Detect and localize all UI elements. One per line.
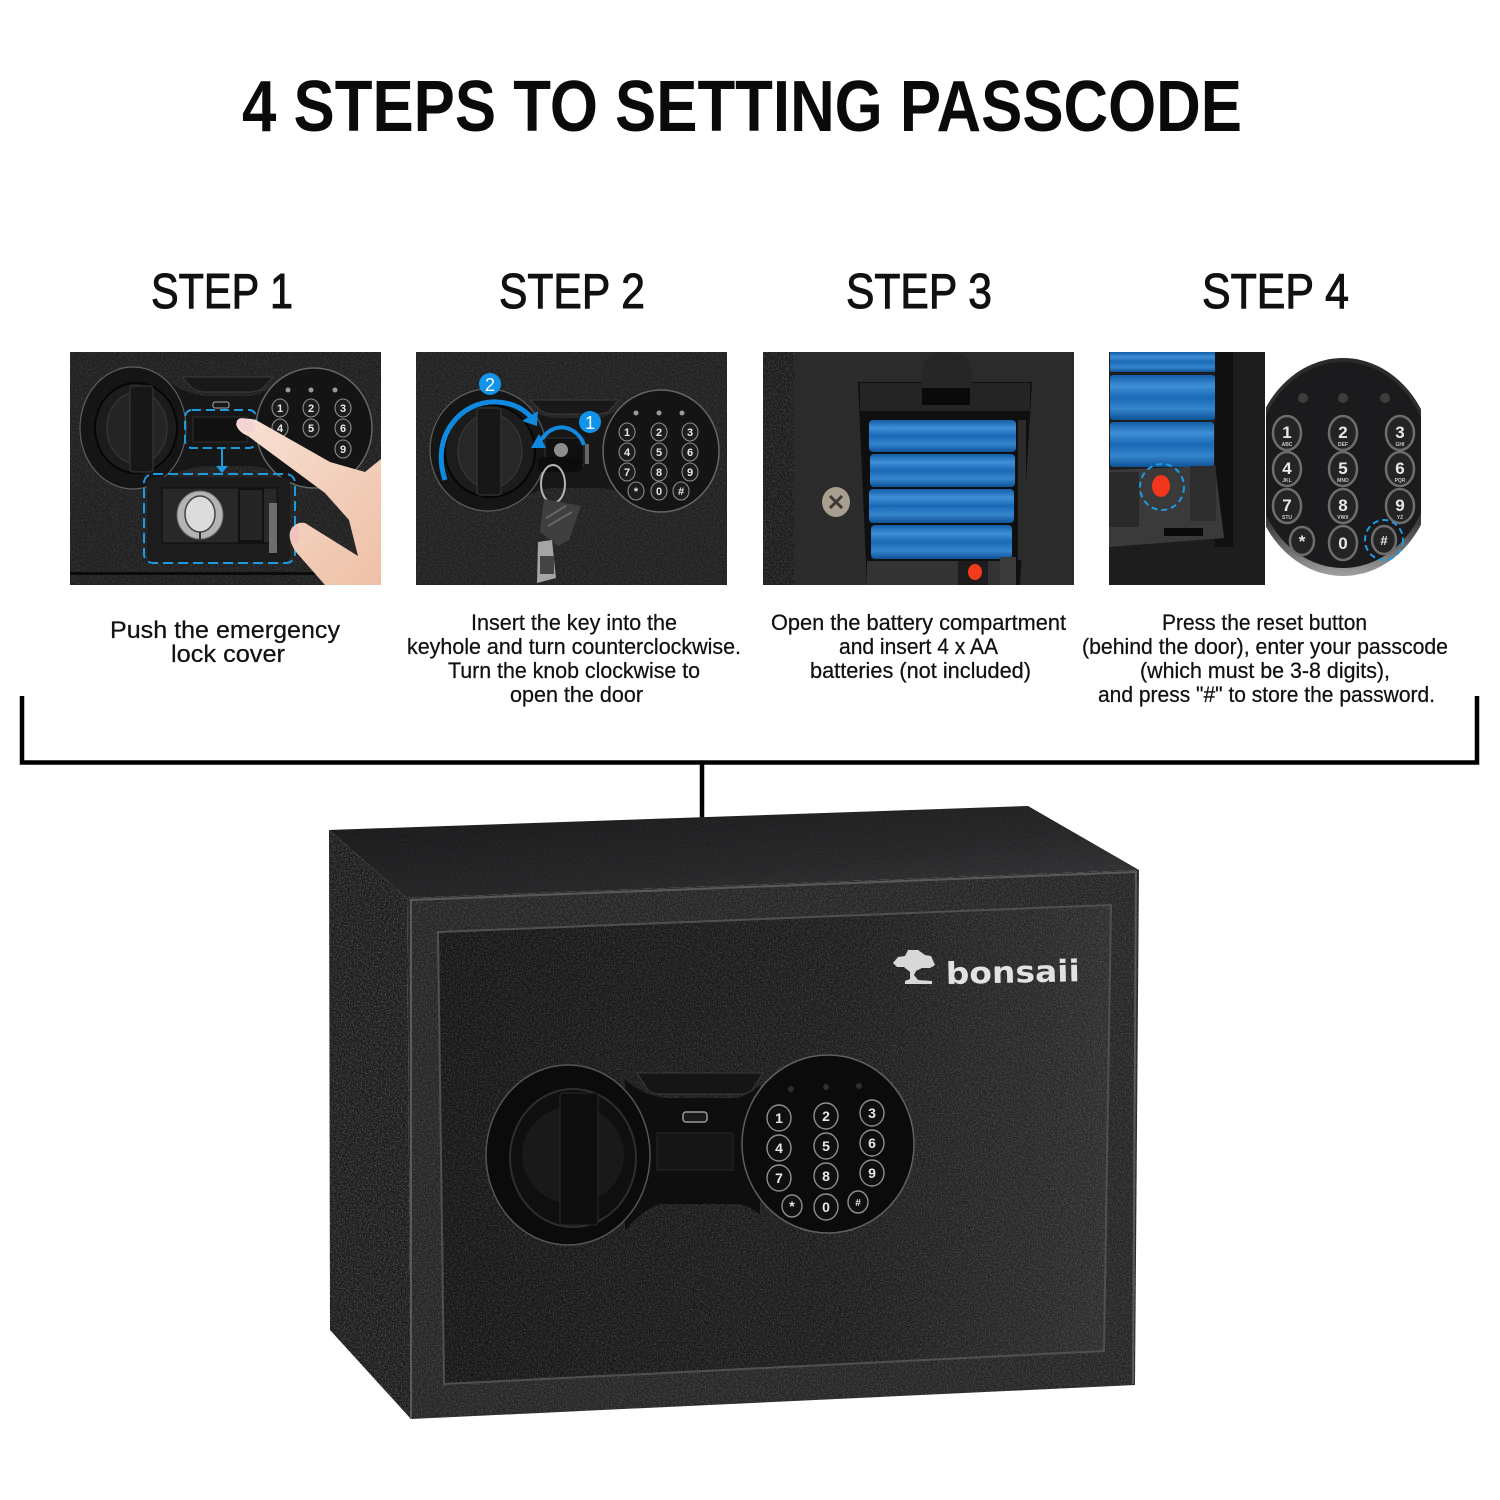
keypad: 8: [822, 1168, 830, 1184]
panel: step 1 photo, push lock cover: [70, 352, 381, 585]
text: step 2 description: Insert the key into the: [471, 610, 677, 635]
text: step 2 description: keyhole and turn counterclockwise.: [407, 634, 741, 659]
panel: step 4 keypad close-up: ABC: [1282, 442, 1293, 448]
text: step 3 description: and insert 4 x AA: [839, 634, 998, 659]
text: step 4 description: (which must be 3-8 digits),: [1140, 658, 1390, 683]
panel: step 2 photo, key and knob: 6: [687, 447, 693, 459]
panel: step 4 keypad close-up: MNO: [1337, 478, 1349, 484]
heading: step 3: STEP 3: [846, 265, 992, 319]
heading: step 2: STEP 2: [499, 265, 645, 319]
logo: bonsaii: bonsaii: [945, 954, 1080, 992]
keypad: [742, 1055, 914, 1233]
keypad: 0: [822, 1199, 830, 1215]
keypad: 9: [868, 1165, 876, 1181]
panel: step 2 photo, key and knob: 1: [624, 427, 630, 439]
panel: step 4 keypad close-up: 4: [1282, 459, 1292, 478]
panel: step 1 photo, push lock cover: 6: [340, 423, 346, 435]
keypad: *: [789, 1198, 795, 1214]
badge: 2: 2: [485, 375, 495, 395]
icon: key in lock: [537, 438, 589, 583]
panel: step 4 keypad close-up: GHI: [1396, 442, 1405, 448]
text: step 3 description: Open the battery compartment: [771, 610, 1066, 635]
keypad: #: [855, 1198, 861, 1209]
text: step 4 description: [1082, 610, 1448, 707]
text: step 1 description: lock cover: [171, 641, 285, 668]
panel: step 1 photo, push lock cover: 2: [308, 403, 314, 415]
panel: step 2 photo, key and knob: [416, 352, 727, 585]
panel: step 4 keypad close-up: JKL: [1282, 478, 1292, 484]
text: step 3 description: [771, 610, 1066, 683]
lock panel with knob: [486, 1065, 763, 1245]
panel: step 1 photo, push lock cover: 5: [308, 423, 314, 435]
arrow: large clockwise: [441, 402, 534, 480]
panel: step 2 photo, key and knob: 3: [687, 427, 693, 439]
panel: step 4 keypad close-up: 6: [1395, 459, 1405, 478]
keypad: 7: [775, 1170, 783, 1186]
safe front door: [407, 870, 1139, 1419]
keypad: 6: [868, 1135, 876, 1151]
text: step 4 description: (behind the door), enter your passcode: [1082, 634, 1448, 659]
badge: 1: [579, 411, 601, 433]
badge: 1: 1: [585, 413, 595, 433]
panel: step 4 keypad close-up: 0: [1338, 534, 1348, 553]
text: step 2 description: Turn the knob clockwise to: [448, 658, 700, 683]
panel: step 1 photo, push lock cover: 3: [340, 403, 346, 415]
text: step 1 description: [110, 617, 340, 668]
text: step 1 description: Push the emergency: [110, 617, 340, 644]
panel: step 2 photo, key and knob: #: [678, 486, 684, 498]
panel: step 4 keypad close-up: DEF: [1338, 442, 1348, 448]
safe top face: [329, 806, 1139, 898]
arrow: small counterclockwise: [537, 427, 584, 445]
panel: step 2 photo, key and knob: 8: [656, 467, 662, 479]
panel: step 4 keypad close-up: #: [1380, 533, 1388, 548]
panel: step 4 keypad close-up: 8: [1338, 496, 1348, 515]
icon: batteries: [869, 420, 1016, 559]
keypad: 3: [868, 1105, 876, 1121]
panel: step 1 photo, push lock cover: 1: [277, 403, 283, 415]
panel: step 4 keypad close-up: PQR: [1395, 478, 1406, 484]
panel: step 4 photo, reset button: [1109, 352, 1265, 585]
panel: step 4 keypad close-up: VWX: [1337, 515, 1349, 521]
panel: step 1 photo, push lock cover: 4: [277, 423, 284, 435]
panel: step 2 photo, key and knob: 0: [656, 486, 662, 498]
panel: step 4 keypad close-up: 1: [1282, 423, 1292, 442]
panel: step 4 keypad close-up: 5: [1338, 459, 1348, 478]
panel: step 4 keypad close-up: 7: [1282, 496, 1292, 515]
text: step 3 description: batteries (not included): [810, 658, 1031, 683]
text: step 2 description: [407, 610, 741, 707]
safe product photo: [329, 806, 1139, 1419]
panel: step 4 keypad close-up: STU: [1282, 515, 1292, 521]
title: 4 STEPS TO SETTING PASSCODE: [242, 67, 1242, 147]
logo: bonsaii: [893, 950, 1080, 992]
heading: step 1: STEP 1: [151, 265, 293, 319]
heading: step 4: STEP 4: [1202, 265, 1349, 319]
keypad: 5: [822, 1138, 830, 1154]
panel: step 2 photo, key and knob: 2: [656, 427, 662, 439]
panel: step 4 keypad close-up: [1266, 358, 1421, 576]
text: step 4 description: and press "#" to store the password.: [1098, 682, 1435, 707]
keypad: 2: [822, 1108, 830, 1124]
panel: step 4 keypad close-up: *: [1299, 532, 1306, 551]
text: step 4 description: Press the reset button: [1162, 610, 1367, 635]
icon: pointing hand: [234, 415, 381, 585]
panel: step 4 keypad close-up: YZ: [1397, 515, 1403, 521]
panel: step 1 photo, push lock cover: 9: [340, 444, 346, 456]
panel: step 2 photo, key and knob: 5: [656, 447, 662, 459]
icon: screw: [822, 487, 850, 517]
keypad: 4: [775, 1140, 783, 1156]
keypad: 1: [775, 1110, 783, 1126]
text: step 2 description: open the door: [510, 682, 643, 707]
panel: step 4 keypad close-up: 2: [1338, 423, 1348, 442]
panel: step 3 photo, battery compartment: [763, 352, 1074, 585]
panel: step 4 keypad close-up: 9: [1395, 496, 1405, 515]
badge: 2: [479, 373, 501, 395]
safe left face: [329, 830, 411, 1419]
panel: step 2 photo, key and knob: 7: [624, 467, 630, 479]
panel: step 2 photo, key and knob: 4: [624, 447, 631, 459]
panel: step 4 keypad close-up: 3: [1395, 423, 1405, 442]
panel: step 2 photo, key and knob: 9: [687, 467, 693, 479]
bracket connector: [22, 696, 1477, 818]
panel: step 2 photo, key and knob: *: [634, 486, 639, 498]
